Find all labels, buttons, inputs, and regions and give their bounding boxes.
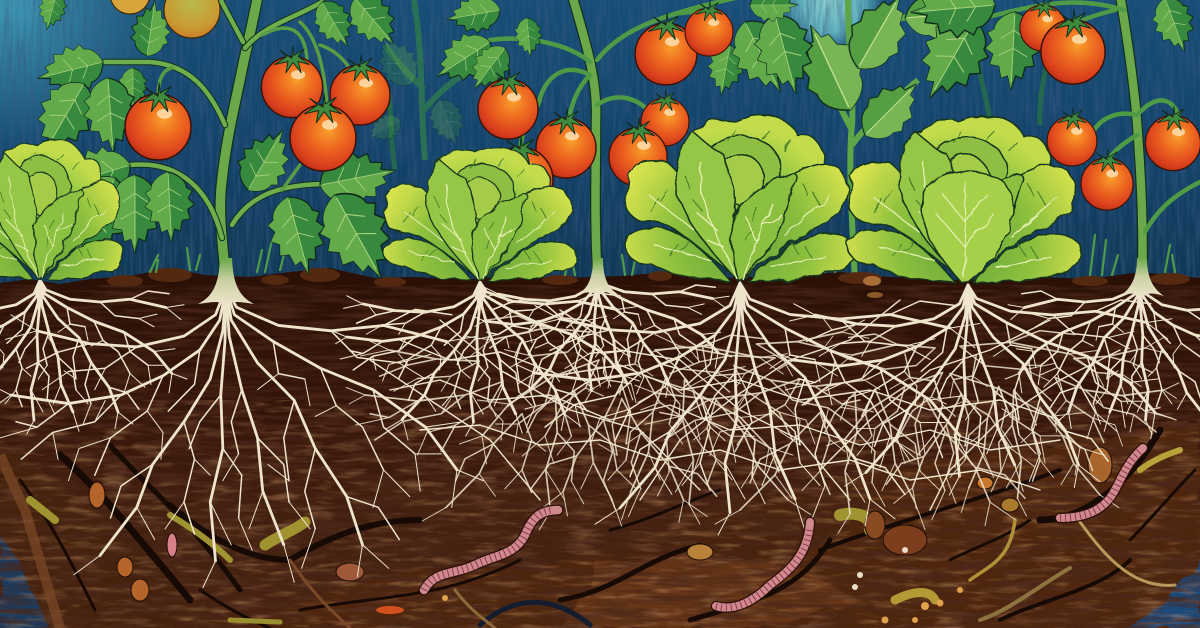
earthworm three	[1060, 448, 1143, 518]
tomatoes middle plant	[478, 0, 733, 213]
tomatoes right plant	[1020, 0, 1200, 210]
lettuce centre	[625, 115, 854, 282]
tomato plant left: leaves	[21, 0, 410, 294]
earthworm two	[716, 522, 810, 608]
tomatoes left plant	[110, 0, 390, 171]
tomato plant right: stems	[985, 0, 1200, 280]
grass tufts	[150, 235, 1175, 275]
interwoven fine roots between plants	[370, 300, 1120, 510]
soil body	[0, 268, 1200, 628]
light green plant behind lettuces	[784, 0, 985, 280]
tomato plant left: stems	[105, 0, 352, 280]
tomato root crowns	[198, 258, 1164, 306]
tomato plant middle: stems	[490, 0, 735, 280]
soil strata and stones	[0, 285, 1200, 628]
lettuce centre left	[383, 147, 576, 280]
background foliage	[363, 0, 1048, 170]
background sky	[0, 0, 1200, 300]
lettuce right	[847, 116, 1081, 283]
tomato plant middle: leaves	[425, 0, 823, 104]
root network	[0, 276, 1200, 588]
earthworm one	[424, 510, 558, 590]
lettuce left	[0, 140, 124, 279]
tomato plant right: leaves	[903, 0, 1200, 114]
